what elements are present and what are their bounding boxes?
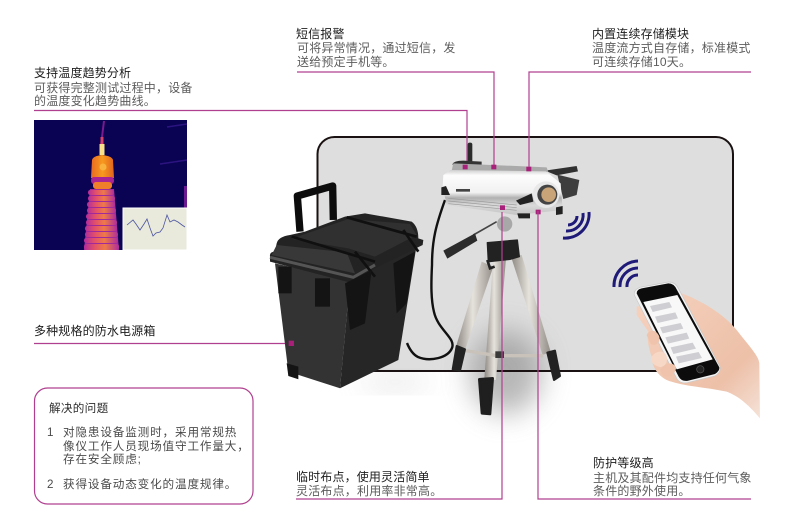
markers on camera	[463, 165, 541, 214]
description: flexible placement: 灵活布点，利用率非常高。	[296, 483, 442, 498]
icon: tripod	[443, 216, 560, 414]
connector line: SMS alert	[297, 72, 494, 167]
panel heading: 解决的问题	[49, 401, 109, 415]
icon: waterproof battery case	[270, 186, 423, 388]
icon: hand holding phone	[634, 282, 760, 418]
list item 1: 存在安全顾虑;	[63, 452, 142, 466]
heading: storage module	[592, 26, 751, 69]
heading: storage module: 可连续存储10天。	[592, 54, 691, 69]
connector line: flexible placement	[296, 212, 502, 499]
heading: temperature trend: 支持温度趋势分析	[34, 65, 131, 80]
heading: flexible placement: 临时布点，使用灵活简单	[296, 469, 430, 484]
panel border	[318, 137, 733, 371]
heading: temperature trend: 的温度变化趋势曲线。	[34, 93, 156, 108]
thermal image with trend chart	[34, 120, 187, 250]
heading: protection level: 防护等级高	[593, 455, 654, 470]
list item 1: 对隐患设备监测时，采用常规热	[63, 425, 237, 439]
connector line: battery case	[34, 342, 291, 344]
grey backdrop panel	[318, 137, 733, 371]
heading: temperature trend	[34, 65, 193, 108]
connector line: protection level	[538, 211, 751, 499]
description: protection level: 主机及其配件均支持任何气象	[593, 470, 752, 485]
heading: SMS alert: 短信报警	[296, 26, 345, 41]
list item 2: 2	[47, 478, 54, 491]
floor shadow under case	[359, 376, 431, 388]
list item 1: 1	[47, 426, 54, 439]
description: temperature trend: 可获得完整测试过程中，设备	[34, 80, 193, 95]
list item 1	[47, 425, 250, 466]
icon: wireless signal near camera	[563, 212, 589, 238]
power cable	[407, 200, 453, 359]
heading: protection level: 条件的野外使用。	[593, 483, 691, 498]
heading: battery case: 多种规格的防水电源箱	[34, 323, 156, 338]
list item 2: 获得设备动态变化的温度规律。	[63, 477, 237, 491]
icon: wireless signal near phone	[614, 261, 638, 287]
description: storage module: 温度流方式自存储，标准模式	[592, 40, 751, 55]
heading: SMS alert	[296, 26, 456, 69]
icon: thermal camera	[441, 143, 579, 218]
connector line: storage module	[529, 72, 751, 168]
panel: problems solved	[34, 388, 253, 504]
marker: battery case	[289, 341, 294, 346]
heading: flexible placement	[296, 469, 442, 498]
heading: storage module: 内置连续存储模块	[592, 26, 689, 41]
connector line: temperature trend	[34, 110, 467, 166]
list item 1: 像仪工作人员现场值守工作量大，	[63, 439, 250, 453]
heading: protection level	[593, 455, 752, 498]
floor shadow under tripod	[470, 330, 542, 414]
heading: SMS alert: 送给预定手机等。	[297, 54, 395, 69]
description: SMS alert: 可将异常情况，通过短信，发	[297, 40, 456, 55]
